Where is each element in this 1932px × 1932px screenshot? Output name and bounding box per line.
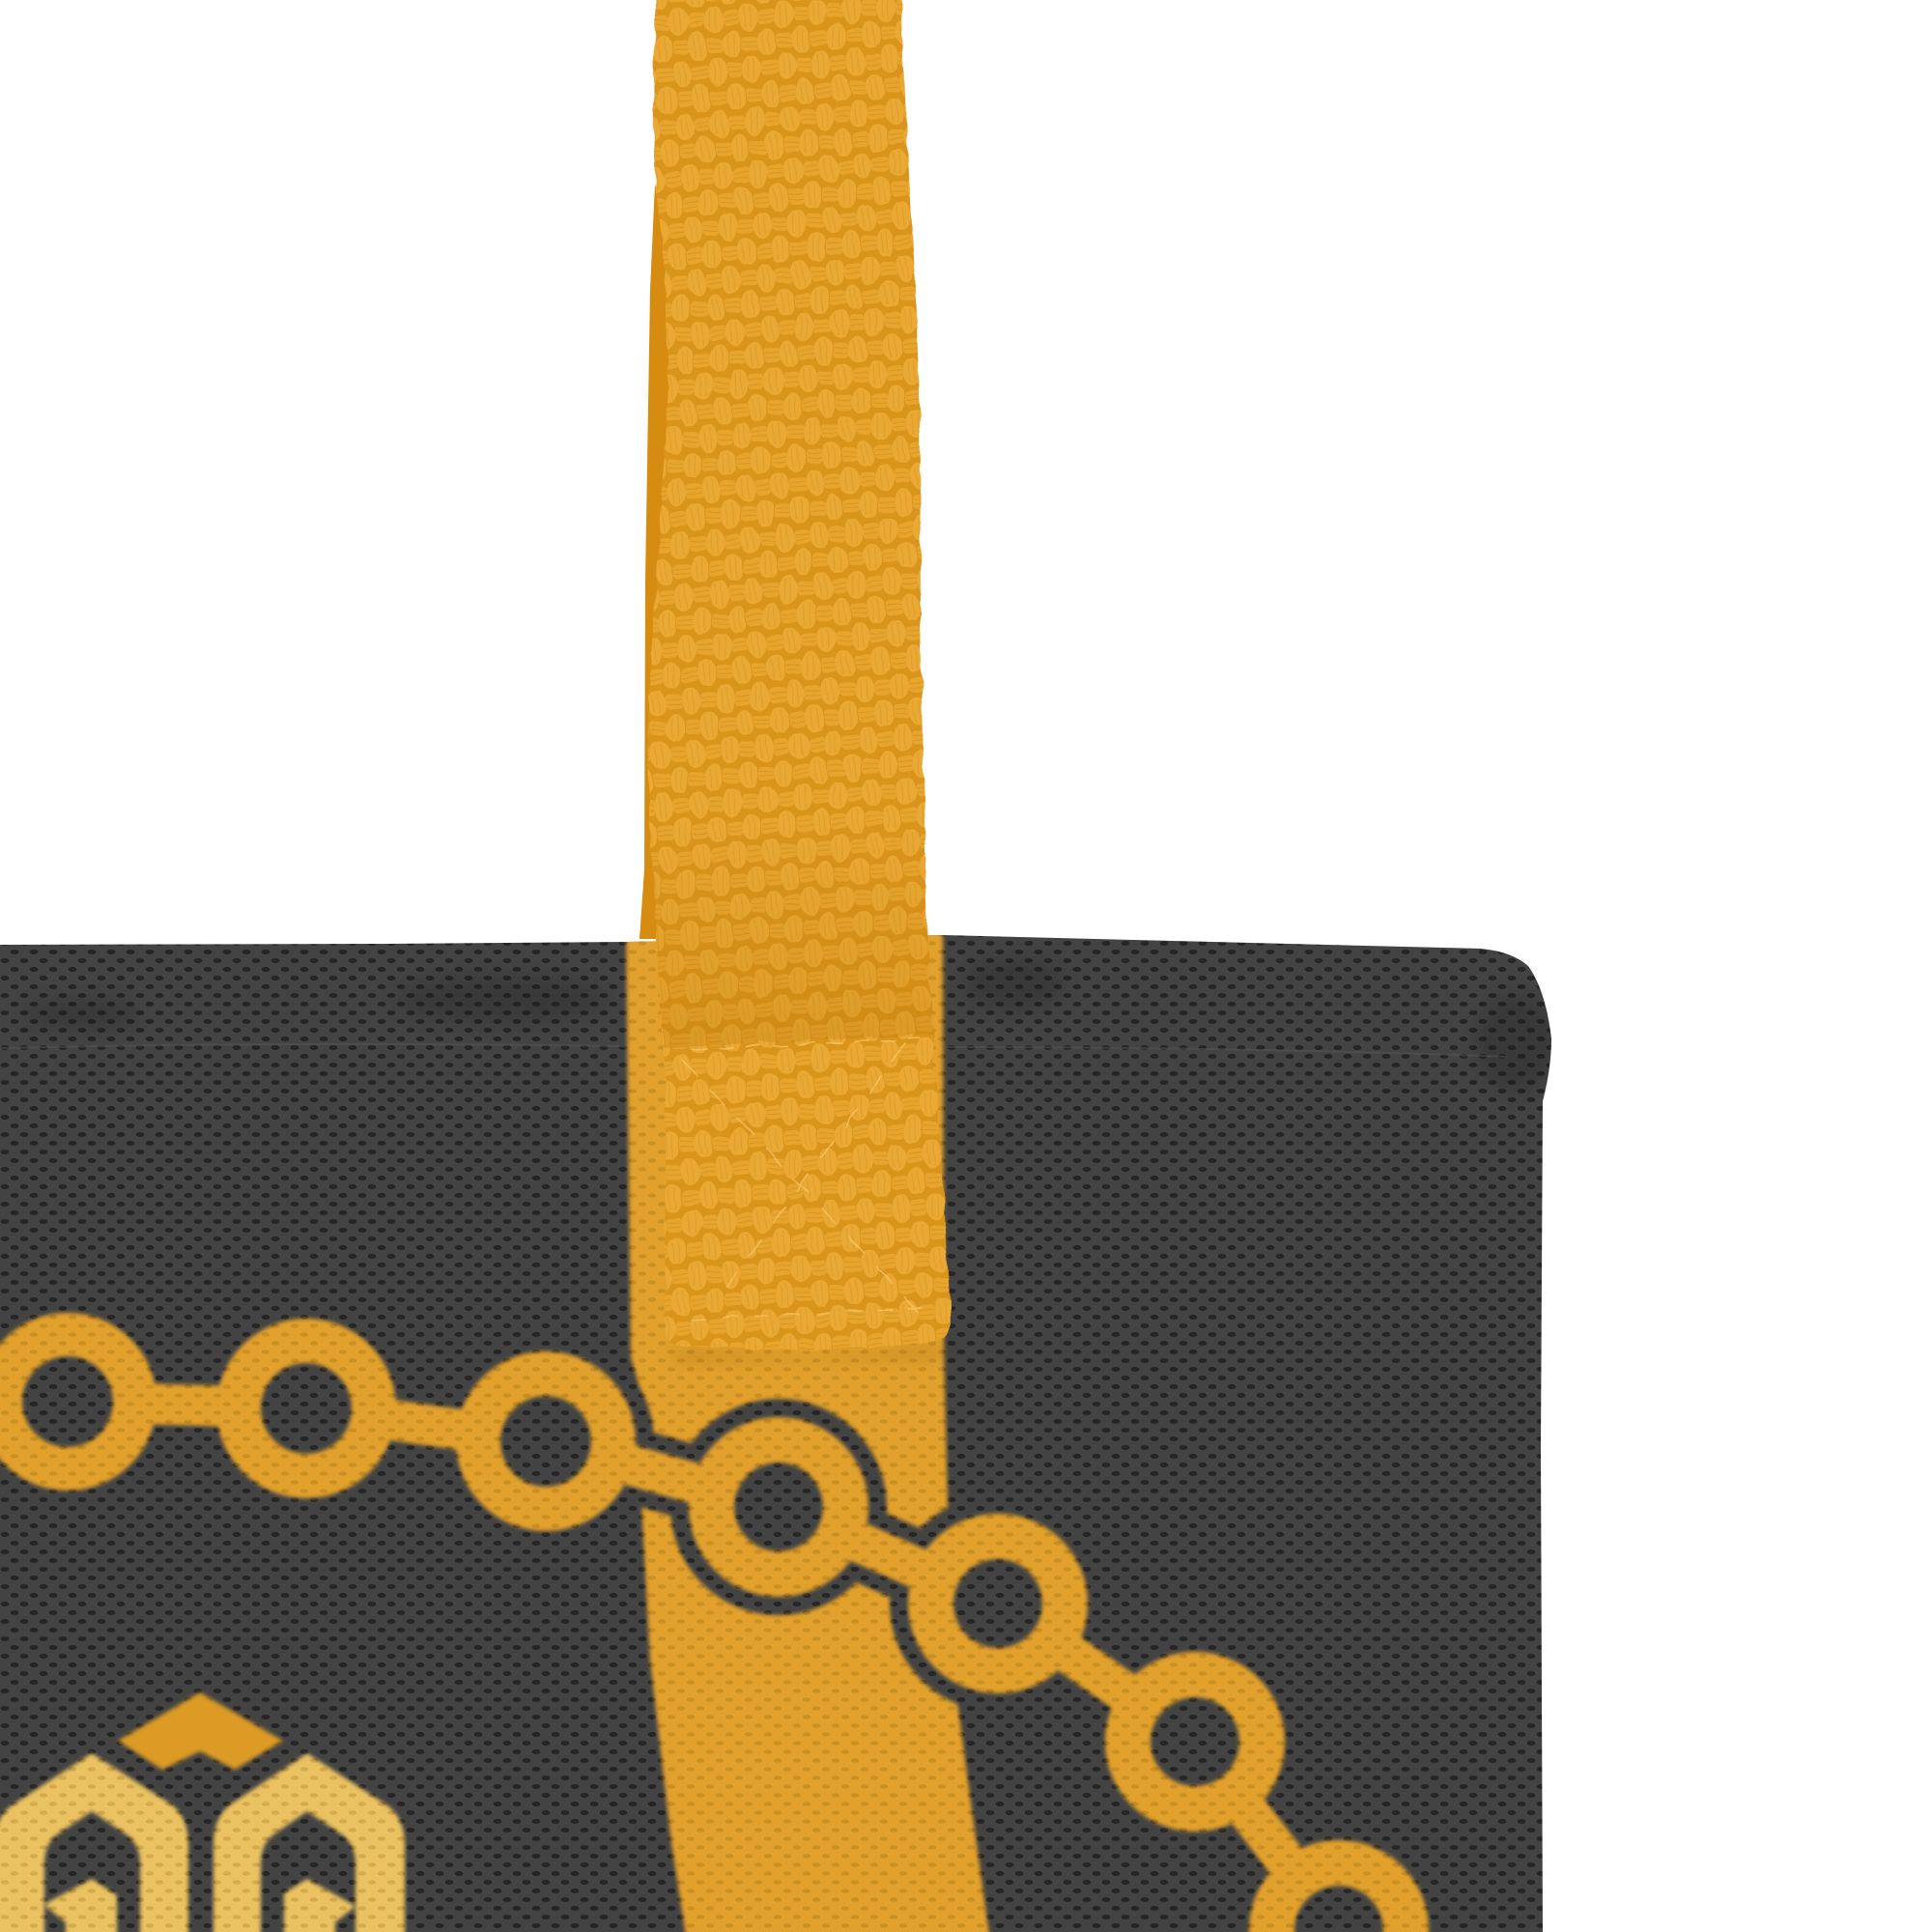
- bag fabric: [0, 927, 1555, 1932]
- strap shape: [649, 0, 951, 1350]
- woven strap: [649, 0, 951, 1350]
- tote bag body: [0, 927, 1555, 1932]
- bag top folds and wrinkles: [54, 966, 1551, 1085]
- strap folded underside: [639, 184, 676, 939]
- bag hem seam: [0, 1044, 1507, 1057]
- stitching: [683, 1038, 921, 1321]
- gold diamond ornament: [118, 1692, 283, 1770]
- gold vertical stripe: [618, 927, 1005, 1932]
- gate motif: [0, 1748, 415, 1932]
- gold ring chain: [0, 1304, 1449, 1932]
- shading above fold: [649, 821, 933, 1048]
- shadow under strap: [671, 1345, 942, 1362]
